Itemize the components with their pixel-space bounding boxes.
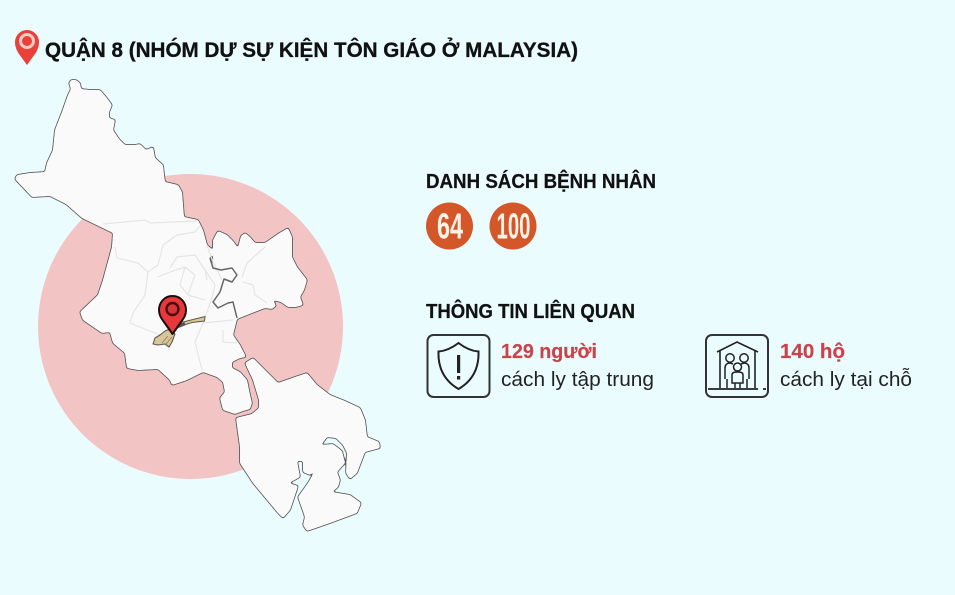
map: district 8 highlight [153, 316, 205, 347]
stat: 140 households: cách ly tại chỗ [780, 368, 912, 391]
map: Ho Chi Minh City with pink circle [15, 80, 380, 531]
stat: 140 households [780, 341, 912, 391]
pink highlight circle [38, 174, 343, 479]
icon: shield warning [428, 335, 490, 397]
stat: 129 people: 129 người [501, 341, 597, 363]
badge: patient 100: 100 [496, 206, 530, 246]
icon: family at home [706, 335, 768, 397]
heading: related information: THÔNG TIN LIÊN QUAN [426, 299, 635, 323]
stat: 129 people: cách ly tập trung [501, 369, 654, 391]
icon: map pin [159, 296, 186, 334]
map: inner river [210, 258, 237, 318]
badge: patient 64 [426, 202, 473, 250]
map: district borders [103, 220, 267, 370]
badge: patient 100 [490, 202, 536, 250]
icon: title location pin [15, 30, 39, 65]
map: mainland districts [15, 80, 307, 414]
badge: patient 64: 64 [437, 206, 463, 246]
title: QUẬN 8 (NHÓM DỰ SỰ KIỆN TÔN GIÁO Ở MALAYSIA) [45, 38, 578, 62]
stat: 140 households: 140 hộ [780, 341, 845, 363]
heading: patient list: DANH SÁCH BỆNH NHÂN [426, 169, 656, 193]
stat: 129 people [501, 341, 654, 391]
map: southern district [236, 358, 380, 531]
